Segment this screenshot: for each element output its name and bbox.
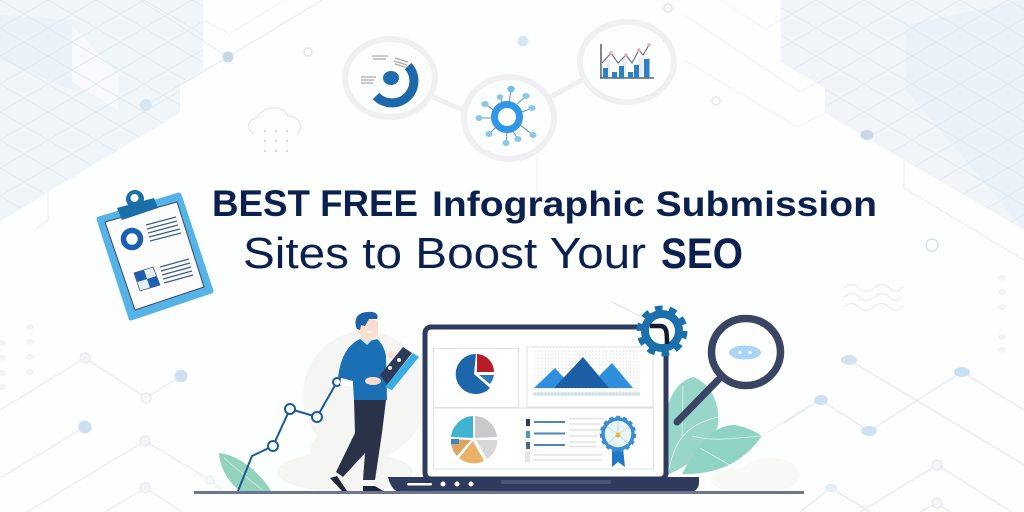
background: top-right isometric grid [684,0,1024,260]
pie chart: multicolor [451,416,498,463]
title line 1 bold: BEST FREE [212,183,418,224]
growth line chart [238,378,353,491]
laptop [388,327,699,492]
ground line [194,491,804,494]
award badge [601,417,635,467]
connectors between icon circles [433,80,582,110]
pie chart: blue and red [456,354,494,394]
icon circle: donut gauge [345,39,435,117]
clipboard [99,190,211,318]
background: small decorative circles [140,4,938,251]
title line 2 SEO: SEO [661,230,743,278]
icon circle: bar and line chart [580,22,674,102]
plant: left leaf [219,453,271,491]
faint line to gear [612,302,640,316]
background: top-left isometric grid [0,0,322,230]
dashboard panels [434,347,654,469]
mountain area chart [533,349,640,397]
background: faint dot columns [0,275,1006,390]
laptop base [388,477,699,492]
magnifying glass [677,318,780,422]
title line 1 continued: Infographic Submission [432,185,877,224]
leaves right [664,377,810,475]
background: bottom-right network lines [784,355,1024,512]
list rows [525,418,604,462]
title [212,183,877,278]
background: bottom-left network lines [0,353,226,512]
soft background blobs behind man [277,331,800,492]
icon circle: network hub [464,77,554,159]
title line 2: Sites to Boost Your [243,229,646,278]
gear [640,309,684,353]
icon: cloud [249,108,300,152]
icon: waves [844,284,903,310]
man with tablet [330,312,419,492]
